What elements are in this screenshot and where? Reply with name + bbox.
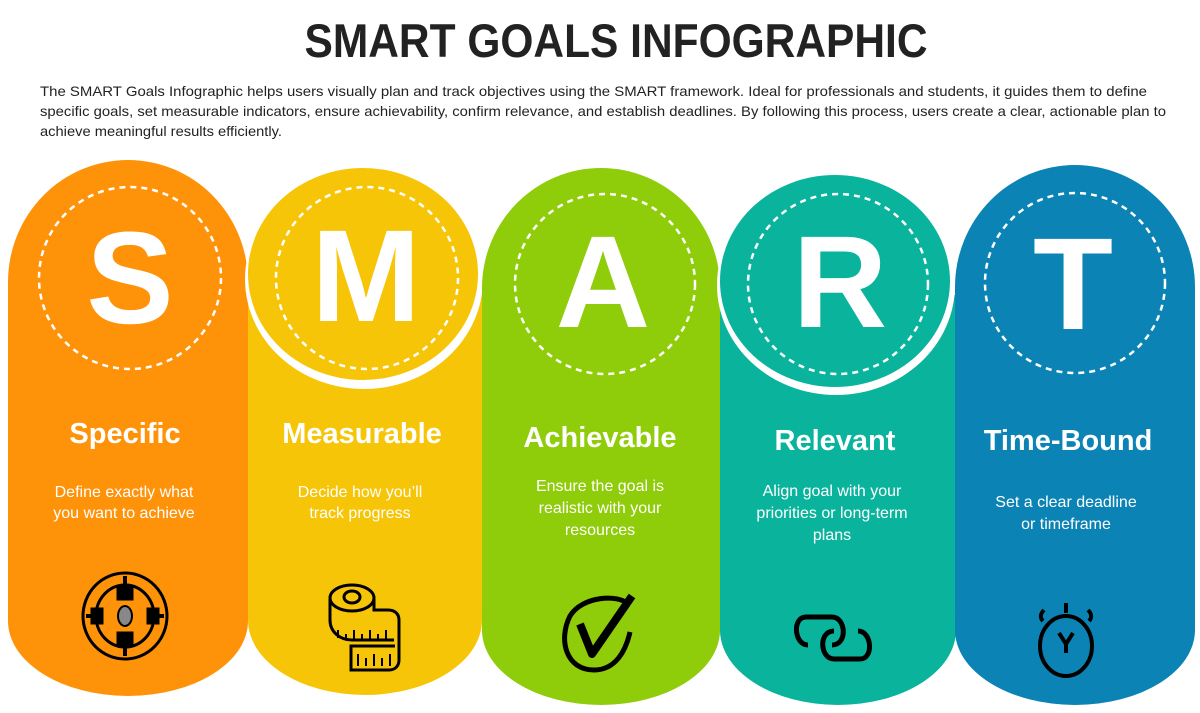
panel: Measurable bbox=[245, 168, 483, 695]
panel: Relevant: R bbox=[793, 208, 887, 355]
panel: Relevant: plans bbox=[813, 527, 851, 544]
panel: Relevant: Relevant bbox=[775, 425, 896, 457]
panel: Time-Bound: Set a clear deadline bbox=[995, 494, 1137, 511]
panel: Time-Bound bbox=[955, 165, 1195, 705]
panel: Measurable: M bbox=[311, 202, 421, 349]
icon: chain link bbox=[796, 617, 870, 659]
panel: Specific: you want to achieve bbox=[53, 505, 195, 522]
panel: Relevant: Align goal with your bbox=[763, 483, 902, 500]
intro paragraph bbox=[40, 83, 1166, 139]
panel: Specific: Define exactly what bbox=[55, 484, 194, 501]
panel: Achievable bbox=[482, 168, 720, 705]
panel: Measurable: track progress bbox=[309, 505, 411, 522]
icon: stopwatch bbox=[1040, 603, 1092, 676]
panel: Measurable: Measurable bbox=[282, 418, 442, 450]
intro paragraph: The SMART Goals Infographic helps users visually plan and track objectives using the SMART framework. Ideal for professionals and students, it guides them to define bbox=[40, 83, 1147, 99]
panel: Achievable: resources bbox=[565, 522, 635, 539]
title: SMART GOALS INFOGRAPHIC bbox=[304, 14, 928, 67]
panel: Time-Bound: T bbox=[1033, 210, 1113, 357]
panel: Time-Bound: or timeframe bbox=[1021, 516, 1111, 533]
panel: Specific: S bbox=[86, 204, 174, 351]
icon: check mark bbox=[565, 596, 632, 670]
panel: Achievable: Ensure the goal is bbox=[536, 478, 664, 495]
icon: target crosshair bbox=[83, 573, 167, 659]
intro paragraph: achieve meaningful results efficiently. bbox=[40, 123, 282, 139]
panel: Specific: Specific bbox=[69, 418, 181, 450]
intro paragraph: specific goals, set measurable indicators, ensure achievability, confirm relevance, and establish deadlines. By following this process, users create a clear, actionable plan to bbox=[40, 103, 1166, 119]
icon: tape measure bbox=[330, 585, 399, 670]
panel: Relevant: priorities or long-term bbox=[756, 505, 908, 522]
panel: Achievable: realistic with your bbox=[539, 500, 662, 517]
panel: Specific bbox=[8, 160, 248, 696]
panel: Measurable: Decide how you’ll bbox=[298, 484, 422, 501]
panel: Achievable: Achievable bbox=[523, 422, 677, 454]
panel: Achievable: A bbox=[556, 208, 650, 355]
panel: Time-Bound: Time-Bound bbox=[984, 425, 1152, 457]
panel: Relevant bbox=[717, 175, 956, 705]
